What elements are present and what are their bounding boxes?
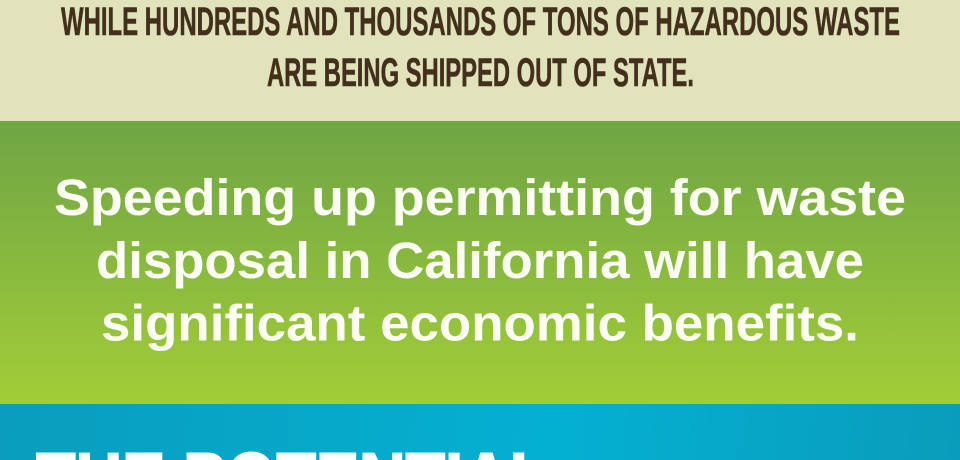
text: economic benefits statement xyxy=(54,169,906,352)
panel: green permitting statement xyxy=(0,121,960,404)
text: economic benefits statement: disposal in California will have xyxy=(96,232,864,289)
panel: blue potential section xyxy=(0,404,960,460)
panel: beige waste shipping statement xyxy=(0,0,960,121)
text: hazardous waste statement xyxy=(61,0,900,95)
text: economic benefits statement: significant economic benefits. xyxy=(101,294,859,352)
text: economic benefits statement: Speeding up permitting for waste xyxy=(54,169,906,226)
